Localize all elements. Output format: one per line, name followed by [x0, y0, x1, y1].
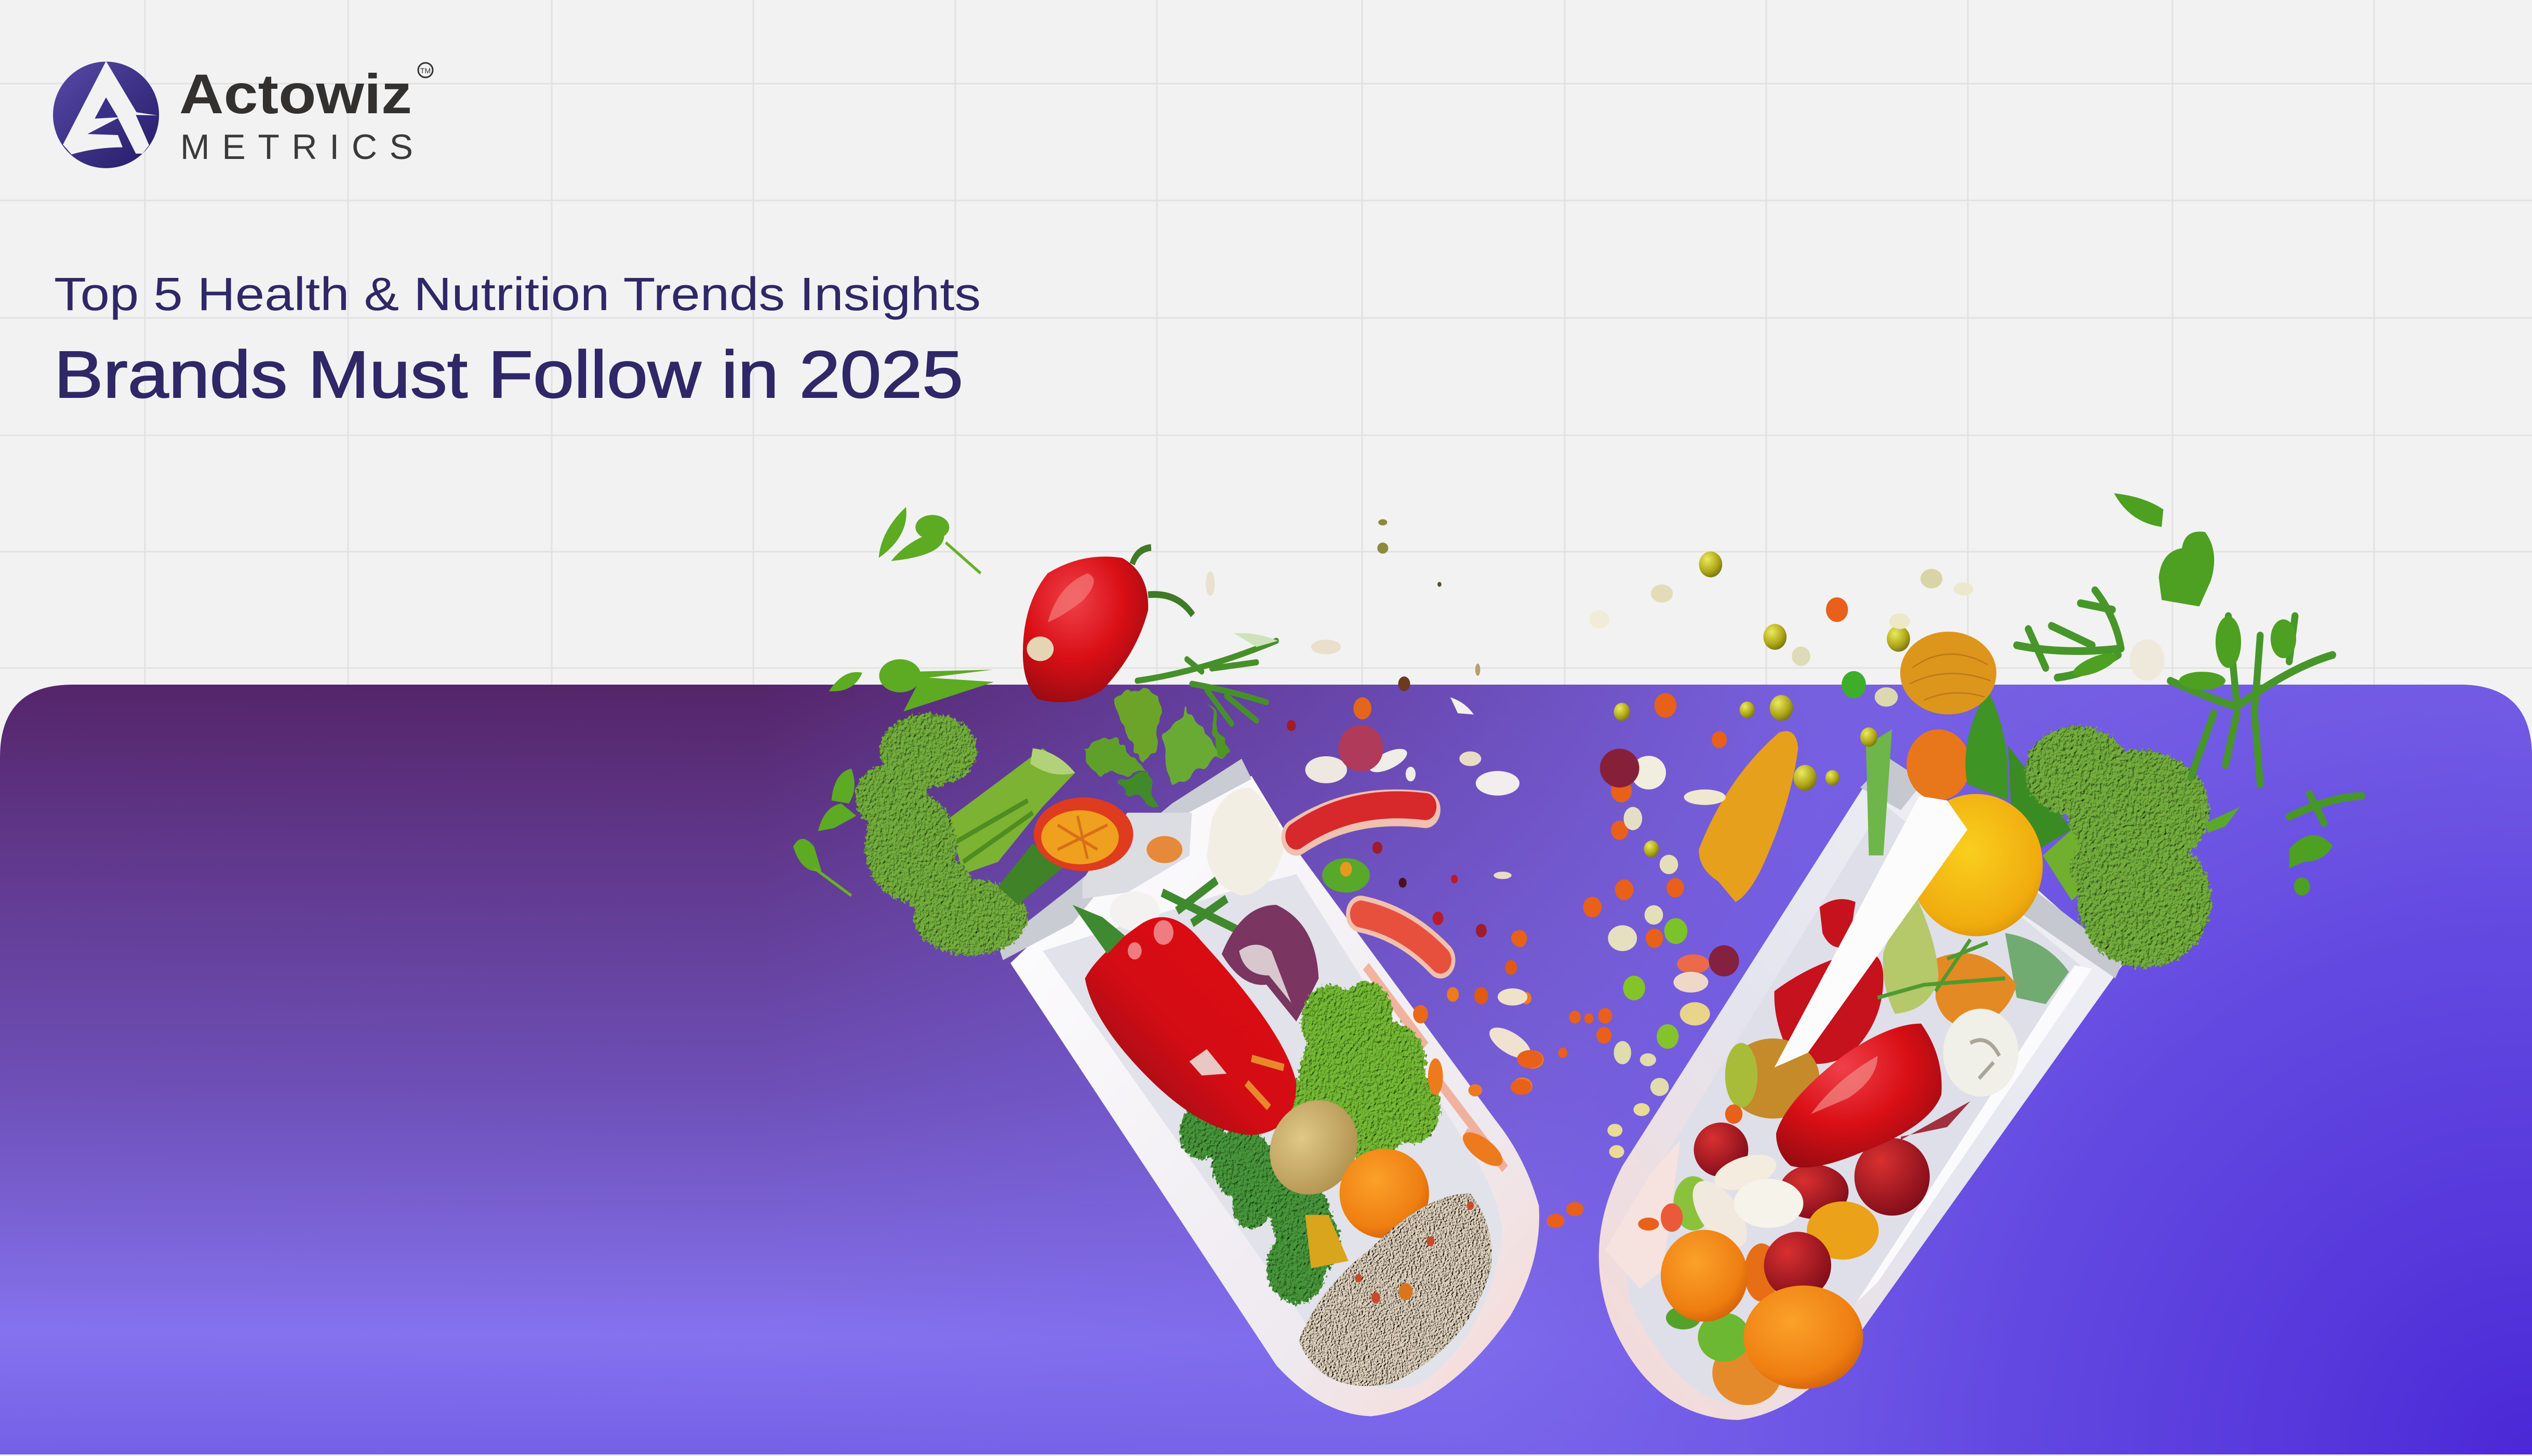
red chili pepper — [1023, 547, 1193, 702]
grain mound — [1299, 1193, 1491, 1386]
white mushroom — [1943, 1009, 2018, 1097]
bottom oranges — [1661, 1230, 1863, 1405]
orange tomato — [1340, 1148, 1429, 1238]
white mushroom — [1207, 788, 1284, 896]
sausages — [1296, 805, 1441, 960]
mid red pepper — [1776, 1023, 1970, 1168]
potato — [1259, 1085, 1368, 1210]
golden corn piece — [1699, 731, 1798, 902]
title line two: Brands Must Follow in 2025 — [54, 338, 963, 412]
broccoli — [855, 713, 1075, 955]
inner red produce — [1725, 899, 2017, 1260]
radicchio — [1222, 905, 1318, 1022]
loose particles — [1511, 552, 2165, 1231]
cucumber slice — [1883, 894, 1938, 1014]
trademark mark — [418, 63, 433, 77]
yellow lemon — [1910, 794, 2043, 936]
beans and small fruits — [1661, 1123, 1803, 1259]
herb behind pepper — [1162, 880, 1236, 929]
cantaloupe seed — [1900, 632, 1996, 714]
grey capsule cap — [998, 759, 1251, 960]
capsule body — [1010, 776, 1539, 1417]
right capsule illustration — [1511, 493, 2362, 1420]
broccoli — [2025, 726, 2240, 967]
big red bell pepper — [1073, 905, 1296, 1135]
title line one: Top 5 Health & Nutrition Trends Insights — [54, 269, 981, 320]
capsule body — [1599, 758, 2122, 1420]
yellow pepper slice — [1305, 1215, 1349, 1268]
tomato half — [1034, 797, 1133, 871]
wordmark Actowiz: Actowiz — [179, 62, 412, 125]
flying particles — [1206, 519, 1559, 1227]
green herbs — [2017, 590, 2362, 823]
trademark mark: TM — [420, 66, 431, 75]
floating leaves — [2071, 493, 2333, 896]
herb sprigs — [1137, 641, 1276, 724]
herb inside capsule — [1877, 940, 2005, 998]
gradient purple panel — [0, 685, 2532, 1454]
white highlight slash — [1775, 796, 1967, 1067]
grey capsule cap — [2017, 888, 2124, 978]
logo icon — [53, 61, 159, 168]
loose orange behind — [1907, 729, 1970, 800]
leafy sprigs — [793, 507, 994, 896]
center leaves — [1083, 688, 1229, 807]
left capsule illustration — [793, 507, 1559, 1417]
green pea pod leaves — [1866, 690, 2072, 1004]
title — [54, 269, 981, 412]
wordmark METRICS: METRICS — [180, 127, 413, 167]
lettuce — [1179, 982, 1441, 1304]
logo — [53, 61, 433, 168]
